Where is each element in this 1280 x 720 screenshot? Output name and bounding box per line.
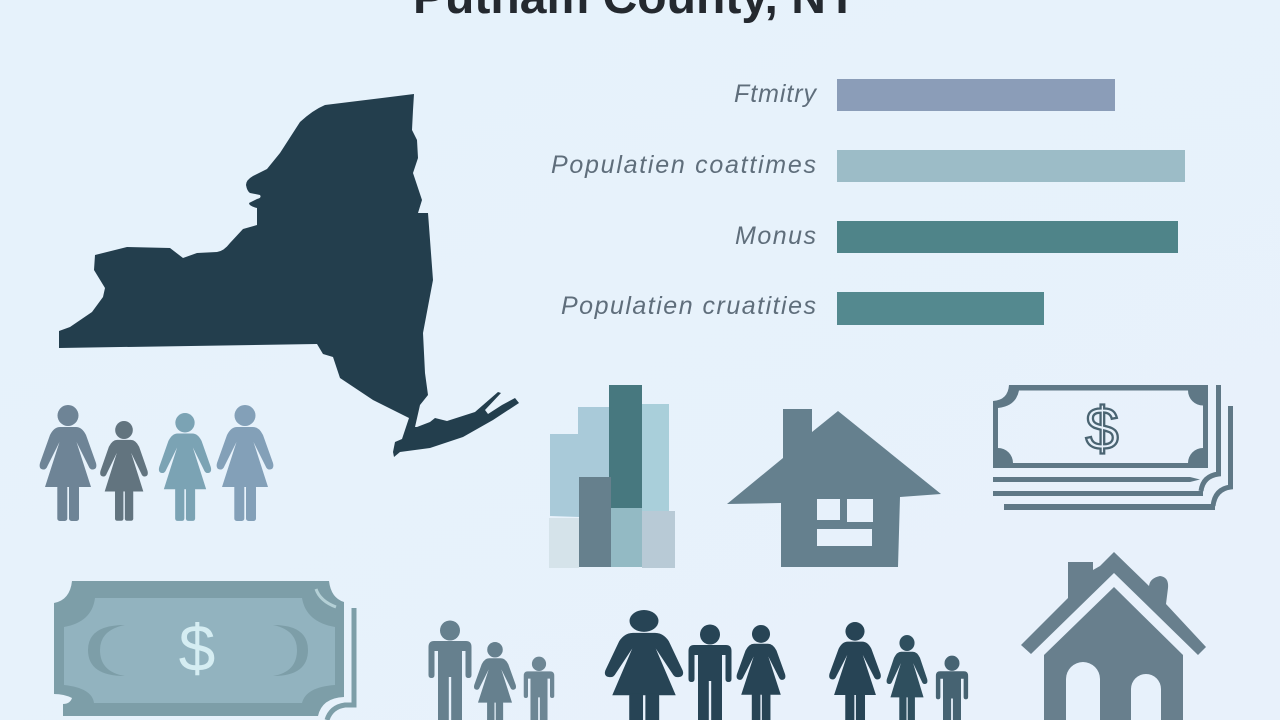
bar: Population cruatities xyxy=(837,292,1044,325)
icon: house with arched doors xyxy=(1021,552,1206,720)
bar label: Population cruatities: Populatien cruatities xyxy=(561,292,816,320)
icon: family of three, grey xyxy=(428,620,554,720)
icon: group of four women xyxy=(40,405,273,521)
bar label: Ftmitry: Ftmitry xyxy=(734,80,818,108)
bar: Ftmitry xyxy=(837,79,1115,111)
icon: family of three, dark to grey xyxy=(829,622,968,720)
icon: stack of banknotes xyxy=(993,385,1230,510)
bar label: Population coattimes: Populatien coattimes xyxy=(551,151,816,179)
bar chart: labelled horizontal bars xyxy=(551,79,1185,325)
bar label: Monus: Monus xyxy=(735,222,816,250)
icon: dollar sign: $ xyxy=(1085,395,1119,462)
bar: Population coattimes xyxy=(837,150,1185,182)
icon: large banknote xyxy=(54,581,354,720)
icon: dollar sign: $ xyxy=(179,611,215,685)
icon: stacked block chart xyxy=(549,385,675,568)
bar: Monus xyxy=(837,221,1178,253)
icon: family of three, dark xyxy=(605,610,785,720)
icon: house with chimney xyxy=(727,409,941,567)
map: New York State silhouette xyxy=(59,94,519,457)
